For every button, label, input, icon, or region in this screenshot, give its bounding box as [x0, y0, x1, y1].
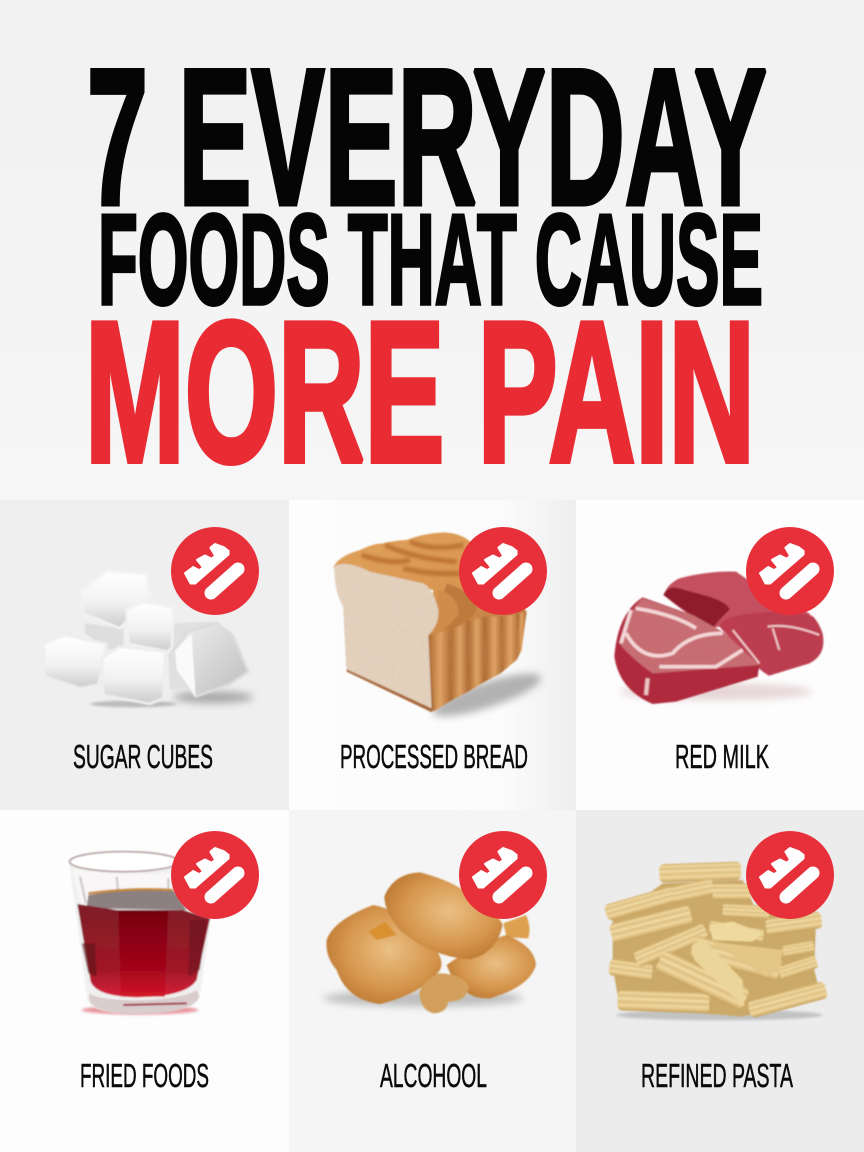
food image: pile of pasta	[604, 861, 828, 1020]
label: FRIED FOODS	[80, 1057, 209, 1094]
label: ALCOHOOL	[380, 1057, 487, 1094]
icon: red badge	[746, 831, 834, 919]
panel background	[576, 500, 864, 810]
panel: red drink labelled fried foods	[0, 810, 289, 1152]
panel: cookies labelled alcohool	[289, 810, 576, 1152]
panel background	[0, 810, 289, 1152]
label: SUGAR CUBES	[73, 738, 213, 775]
food image: sugar cubes	[43, 571, 253, 707]
icon: red badge	[746, 527, 834, 615]
panel background	[0, 500, 289, 810]
food image: glass of red liquid	[69, 852, 213, 1015]
panel background	[576, 810, 864, 1152]
label: RED MILK	[675, 738, 769, 775]
title background	[0, 0, 864, 500]
panel background	[289, 500, 576, 810]
panel: red meat labelled red milk	[576, 500, 864, 810]
panel: sugar cubes	[0, 500, 289, 810]
title	[85, 29, 767, 504]
panel: refined pasta	[576, 810, 864, 1152]
panel background	[289, 810, 576, 1152]
icon: red badge	[171, 831, 259, 919]
food image: red meat	[614, 572, 823, 704]
food image: golden cookies	[323, 872, 536, 1013]
food image: bread loaf	[333, 532, 544, 725]
label: PROCESSED BREAD	[340, 738, 528, 775]
icon: red badge	[459, 527, 547, 615]
panel: processed bread	[289, 500, 576, 810]
icon: red badge	[171, 527, 259, 615]
icon: red badge	[459, 831, 547, 919]
